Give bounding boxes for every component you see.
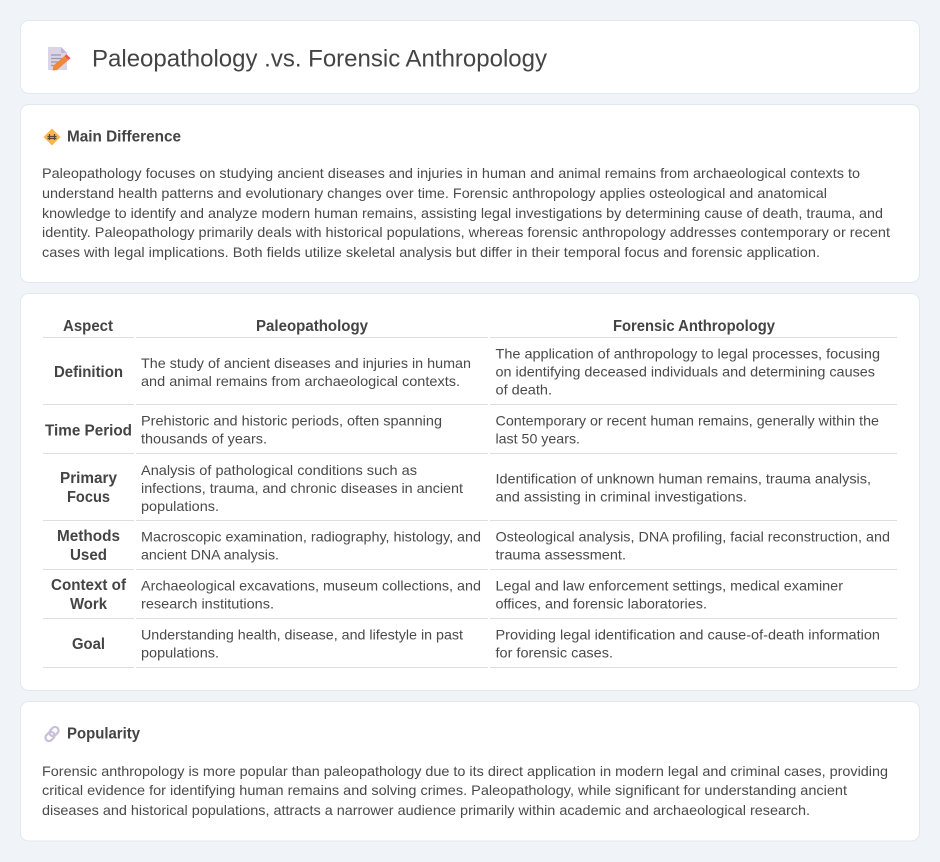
row: definition: The application of anthropology to legal processes, focusing — [496, 346, 880, 362]
text block: main difference: Paleopathology focuses on studying ancient diseases and injuries in human and animal remains from archaeological contexts to — [42, 165, 860, 181]
table header row: Paleopathology — [256, 318, 368, 335]
table header row — [63, 318, 775, 335]
row: primary focus: populations. — [141, 498, 219, 514]
row: time period: last 50 years. — [496, 430, 580, 446]
row: context of work: offices, and forensic laboratories. — [496, 596, 707, 612]
row: time period — [45, 412, 879, 446]
text block: popularity: critical evidence for identifying human remains and solving crimes. Paleopathology, while significant for understanding ancient — [42, 782, 847, 798]
table header row: Forensic Anthropology — [613, 318, 775, 335]
row: goal: Goal — [72, 636, 105, 653]
row: definition — [54, 346, 880, 398]
row: context of work: research institutions. — [141, 596, 274, 612]
row: definition: Definition — [54, 364, 123, 381]
row: context of work: Work — [70, 596, 107, 613]
row: goal: Understanding health, disease, and lifestyle in past — [141, 626, 463, 642]
icon: orange diamond sign — [44, 128, 60, 146]
text block: popularity: diseases and historical populations, attracts a narrower audience primarily within academic and archaeological research. — [42, 802, 810, 818]
row: definition: on identifying deceased individuals and determining causes — [496, 364, 875, 380]
row: methods used: trauma assessment. — [496, 546, 626, 562]
text block: main difference: cases with legal implications. Both fields utilize skeletal analysis but differ in their temporal focus and forensic application. — [42, 244, 820, 260]
row: context of work — [51, 577, 843, 613]
row: time period: Contemporary or recent human remains, generally within the — [496, 412, 879, 428]
row: time period: Time Period — [45, 422, 132, 440]
row: methods used: Methods — [57, 528, 120, 545]
row: definition: The study of ancient diseases and injuries in human — [141, 355, 471, 371]
table header row: Aspect — [63, 318, 114, 335]
row: primary focus: and assisting in criminal investigations. — [496, 488, 747, 504]
row: goal: populations. — [141, 644, 219, 660]
text block: main difference: understand health patterns and evolutionary changes over time. Forensic anthropology applies osteological and anatomical — [42, 185, 827, 201]
row: methods used — [57, 528, 890, 564]
row: context of work: Archaeological excavations, museum collections, and — [141, 578, 481, 594]
text block: popularity — [42, 763, 888, 818]
row: primary focus — [60, 462, 871, 514]
text block: main difference — [42, 165, 890, 260]
row: time period: Prehistoric and historic periods, often spanning — [141, 412, 442, 428]
panel: header — [20, 20, 920, 94]
panel: main difference — [20, 104, 920, 282]
icon: document with pencil — [48, 47, 70, 70]
row: goal: for forensic cases. — [496, 644, 613, 660]
heading: main difference: Main Difference — [67, 128, 181, 146]
row: primary focus: Analysis of pathological conditions such as — [141, 462, 417, 478]
title: Paleopathology .vs. Forensic Anthropology — [92, 46, 547, 72]
row: definition: of death. — [496, 382, 552, 398]
panel: comparison table — [20, 294, 920, 690]
heading: popularity: Popularity — [67, 726, 140, 742]
row: methods used: Used — [70, 547, 107, 564]
row: methods used: ancient DNA analysis. — [141, 546, 279, 562]
row: methods used: Macroscopic examination, radiography, histology, and — [141, 528, 481, 544]
row: primary focus: Identification of unknown human remains, trauma analysis, — [496, 470, 871, 486]
row: primary focus: infections, trauma, and chronic diseases in ancient — [141, 480, 463, 496]
icon: chain link — [44, 725, 60, 743]
row: context of work: Legal and law enforcement settings, medical examiner — [496, 578, 843, 594]
text block: main difference: knowledge to identify and analyze modern human remains, assisting legal investigations by determining cause of death, trauma, and — [42, 205, 883, 221]
text block: main difference: identity. Paleopathology primarily deals with historical populations, whereas forensic anthropology addresses contemporary or recent — [42, 224, 890, 240]
row: time period: thousands of years. — [141, 430, 267, 446]
panel: popularity — [20, 702, 920, 841]
row: definition: and animal remains from archaeological contexts. — [141, 373, 460, 389]
row: context of work: Context of — [51, 577, 127, 594]
row: goal — [72, 626, 880, 660]
row: primary focus: Focus — [67, 489, 110, 506]
row: methods used: Osteological analysis, DNA profiling, facial reconstruction, and — [496, 528, 890, 544]
row: goal: Providing legal identification and cause-of-death information — [496, 626, 880, 642]
text block: popularity: Forensic anthropology is more popular than paleopathology due to its direct application in modern legal and criminal cases, providing — [42, 763, 888, 779]
row: primary focus: Primary — [60, 470, 117, 487]
